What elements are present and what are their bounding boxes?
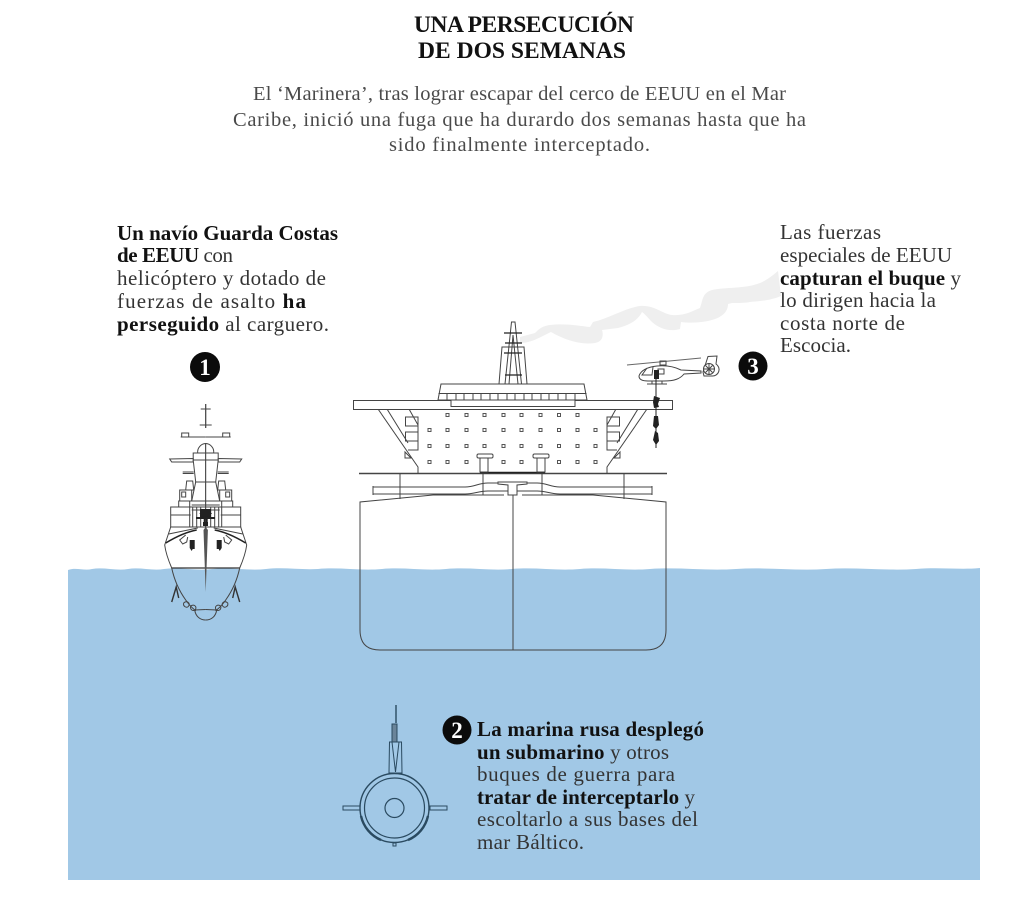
text: coast guard: perseguido al carguero. <box>117 312 329 336</box>
ship side brackets <box>378 409 647 473</box>
text: coast guard: Un navío Guarda Costas <box>117 221 338 245</box>
helicopter tail <box>703 356 719 376</box>
marker 1: 1 <box>199 355 211 380</box>
ship bollards <box>477 454 549 472</box>
text: special forces: lo dirigen hacia la <box>780 288 937 312</box>
ship main deck <box>354 400 672 410</box>
ship hull <box>360 495 666 650</box>
helicopter body <box>639 366 701 381</box>
cargo ship 'Marinera' <box>354 322 672 650</box>
text: special forces <box>780 220 962 357</box>
submarine periscope <box>392 724 397 742</box>
title: UNA PERSECUCIÓN <box>414 11 634 38</box>
warship bow <box>204 527 208 592</box>
title <box>414 11 634 64</box>
text: russian navy: un submarino y otros <box>477 740 669 764</box>
text: russian navy: escoltarlo a sus bases del <box>477 807 698 831</box>
text: russian navy <box>477 717 704 854</box>
text: coast guard: fuerzas de asalto ha <box>117 289 306 313</box>
text: special forces: Escocia. <box>780 333 851 357</box>
intro text: sido finalmente interceptado. <box>389 134 650 156</box>
marker 2: 2 <box>451 718 463 743</box>
text: russian navy: tratar de interceptarlo y <box>477 785 696 809</box>
smoke from funnel <box>520 271 781 343</box>
rope <box>655 372 657 448</box>
text: coast guard: de EEUU con <box>117 243 234 267</box>
intro text: Caribe, inició una fuga que ha durardo dos semanas hasta que ha <box>233 109 806 131</box>
text: special forces: Las fuerzas <box>780 220 881 244</box>
text: coast guard: helicóptero y dotado de <box>117 266 326 290</box>
ship mast <box>499 322 527 384</box>
submarine sail <box>389 742 402 773</box>
text: russian navy: mar Báltico. <box>477 830 584 854</box>
sea <box>68 568 980 880</box>
submarine antenna <box>395 705 397 723</box>
ship deck structure <box>359 474 667 499</box>
helicopter rotor <box>627 358 701 365</box>
marker 2 <box>442 716 472 744</box>
text: russian navy: buques de guerra para <box>477 762 676 786</box>
warship bridge machinery <box>196 509 215 526</box>
submarine planes <box>343 806 447 846</box>
intro text <box>233 83 806 156</box>
marker 1 <box>190 352 220 382</box>
title: DE DOS SEMANAS <box>418 38 626 64</box>
text: special forces: costa norte de <box>780 311 905 335</box>
ship bridge <box>438 384 587 406</box>
submarine <box>343 705 447 846</box>
helicopter with fast-rope team <box>627 356 719 448</box>
intro text: El ‘Marinera’, tras lograr escapar del cerco de EEUU en el Mar <box>253 83 786 105</box>
text: russian navy: La marina rusa desplegó <box>477 717 704 741</box>
text: special forces: especiales de EEUU <box>780 243 952 267</box>
text: special forces: capturan el buque y <box>780 266 962 290</box>
warship <box>165 404 247 620</box>
marker 3: 3 <box>747 354 759 379</box>
soldiers <box>653 370 660 445</box>
marker 3 <box>738 352 768 380</box>
submarine hull <box>360 774 429 842</box>
text: coast guard <box>117 221 338 336</box>
ship portholes <box>428 414 597 464</box>
